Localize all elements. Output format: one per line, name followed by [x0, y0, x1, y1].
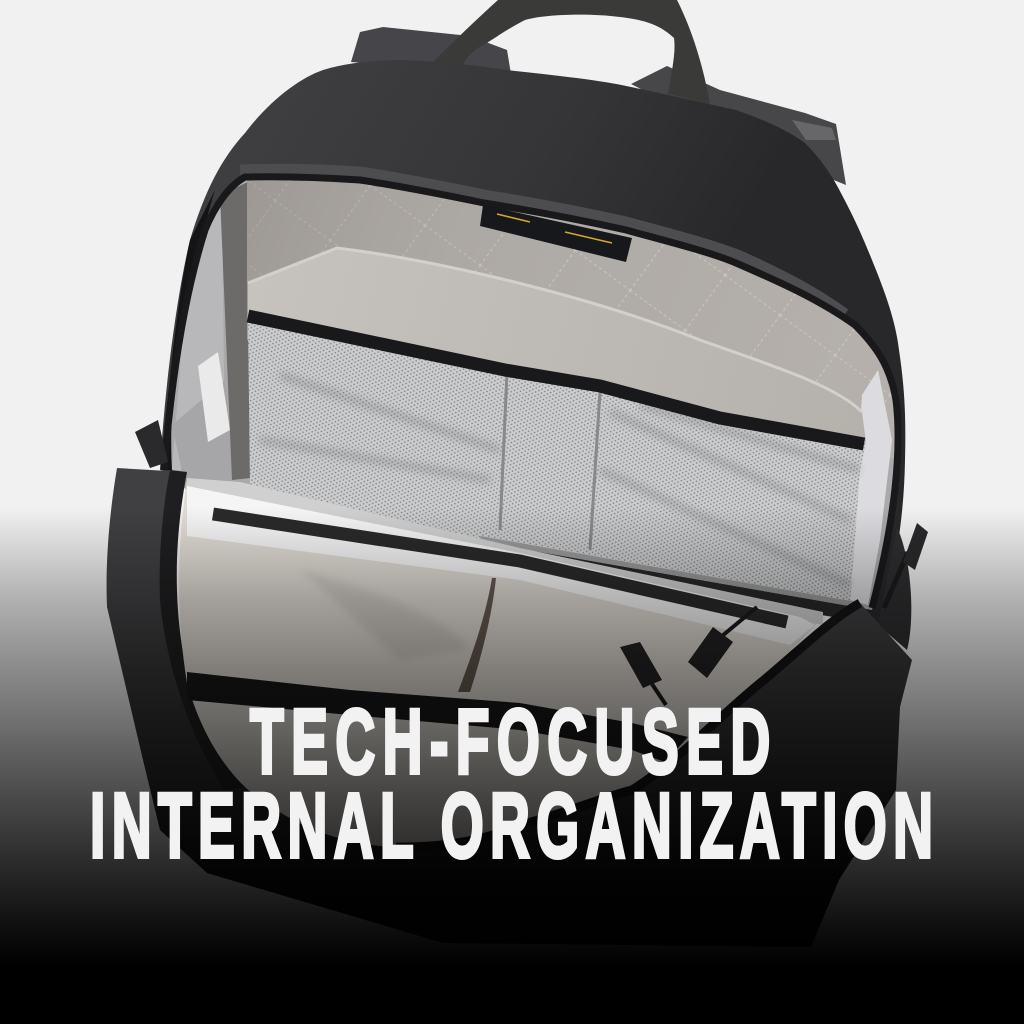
organizer zipper	[213, 514, 787, 622]
left silver lining	[172, 200, 225, 470]
mesh lower seam	[480, 540, 850, 605]
quilted back wall	[247, 160, 900, 460]
left gusset band	[220, 182, 250, 480]
side zipper pull right	[884, 523, 928, 608]
brand label	[480, 205, 632, 262]
pocket fold	[458, 578, 496, 692]
interior base	[171, 180, 894, 610]
right side body panel	[878, 527, 911, 650]
left rear shoulder strap	[351, 27, 511, 74]
mesh seams	[500, 372, 600, 550]
mesh folds	[260, 375, 860, 585]
white trim band	[187, 486, 815, 645]
pocket binding	[248, 316, 864, 444]
label stripes	[497, 214, 612, 243]
right silver lining	[850, 370, 892, 605]
zipper slider and cord	[722, 607, 757, 636]
side zipper pull left	[135, 420, 168, 468]
zipper pull cord	[652, 684, 666, 705]
title line 1: TECH-FOCUSED	[250, 691, 770, 794]
front flap outer shell	[107, 468, 912, 947]
front flap organizer panel	[179, 478, 823, 847]
title line 2: INTERNAL ORGANIZATION	[90, 775, 933, 878]
lower pocket zipper	[187, 672, 688, 762]
mesh web trim	[187, 478, 823, 625]
padded laptop sleeve	[248, 248, 866, 442]
strap edge highlight	[792, 120, 836, 140]
main zipper	[164, 177, 898, 608]
flap inner binding	[396, 603, 860, 847]
interior zipper tape	[240, 169, 845, 314]
flap zipper strip	[160, 470, 247, 790]
main shell	[160, 60, 905, 625]
left lining lower section	[174, 381, 225, 470]
backpack photo illustration	[107, 0, 928, 947]
title	[90, 691, 933, 878]
zipper pull tag right	[688, 627, 733, 678]
care tag	[198, 352, 230, 442]
top carry handle	[433, 0, 710, 104]
shell left edge dark	[162, 190, 215, 470]
right rear shoulder strap	[631, 66, 846, 185]
fabric shading	[300, 570, 470, 660]
bag interior	[171, 180, 895, 610]
mesh pockets	[248, 316, 866, 605]
zipper pull tag left	[620, 642, 662, 688]
